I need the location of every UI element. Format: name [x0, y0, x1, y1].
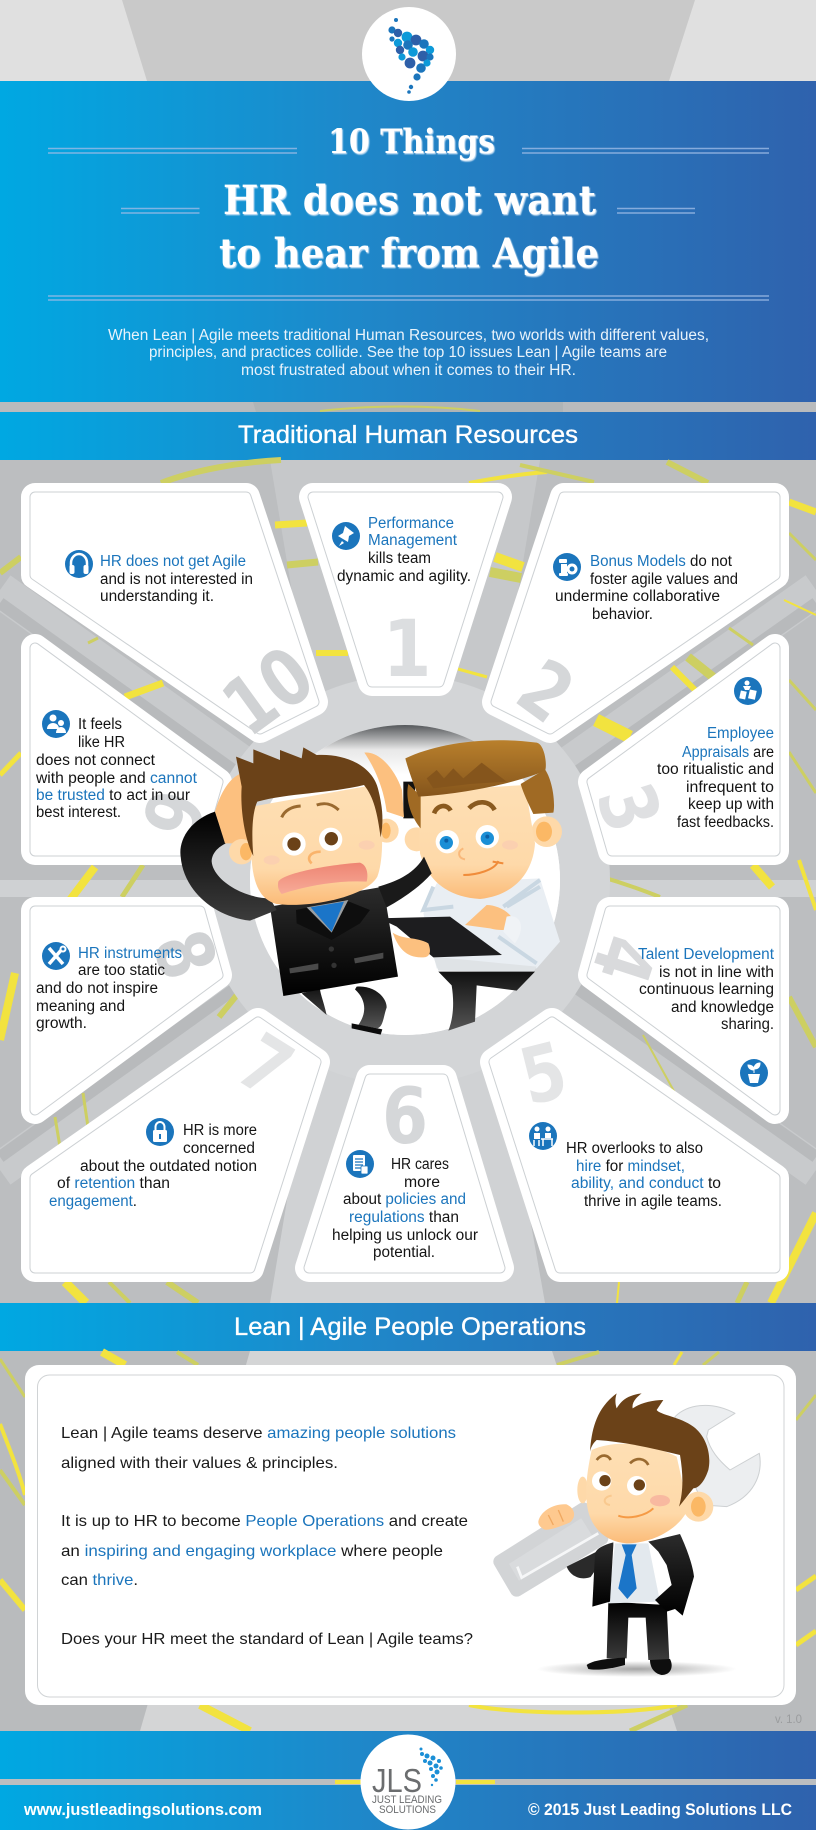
panel text: like HR	[78, 734, 125, 751]
number 8: 8	[134, 919, 235, 991]
icon: padlock	[146, 1118, 174, 1146]
illustration: man carrying wrench	[500, 1393, 760, 1677]
section heading band: traditional HR: Traditional Human Resources	[238, 421, 578, 449]
panel 4: Talent Development	[573, 911, 775, 1110]
top grey backdrop	[0, 0, 816, 81]
number 6: 6	[382, 1072, 428, 1162]
panel text	[49, 1122, 257, 1210]
panel text: be trusted to act in our	[36, 787, 190, 804]
copyright: © 2015 Just Leading Solutions LLC	[528, 1800, 792, 1819]
panel text: It feels	[78, 716, 122, 733]
panel text: meaning and	[36, 998, 125, 1015]
number 3: 3	[578, 773, 679, 842]
panel 8: HR instruments	[35, 911, 235, 1110]
icon: document	[346, 1150, 374, 1178]
panel text: infrequent to	[686, 779, 774, 796]
panel 5: hiring for mindset	[494, 1022, 775, 1268]
conclusion text: can thrive.	[61, 1572, 138, 1589]
section heading band: traditional HR	[0, 412, 816, 460]
conclusion text	[61, 1425, 473, 1648]
website: www.justleadingsolutions.com	[23, 1800, 262, 1819]
panel text: foster agile values and	[590, 571, 738, 588]
panel text: kills team	[368, 550, 431, 567]
title: 10 Things	[328, 122, 495, 162]
panel text: about policies and	[343, 1191, 466, 1208]
panel text	[638, 946, 775, 1033]
panel text: HR is more	[183, 1122, 257, 1139]
panel text: potential.	[373, 1244, 435, 1261]
icon: tools	[42, 942, 70, 970]
right colleague: shirt, head and tablet	[379, 740, 562, 1031]
number 4: 4	[573, 925, 674, 994]
title: HR does not want	[223, 177, 596, 224]
panel 1: Performance Management	[313, 497, 498, 695]
panel text	[337, 515, 471, 585]
panel text: Employee	[707, 725, 774, 742]
section heading band: people operations	[0, 1303, 816, 1351]
panel 6: policies and regulations	[309, 1072, 500, 1268]
panel text: concerned	[183, 1140, 255, 1157]
panel 9: trust	[35, 648, 226, 851]
logo badge	[362, 7, 456, 101]
icon: potted plant	[740, 1059, 768, 1087]
panel text: with people and cannot	[35, 770, 198, 787]
panel text: Talent Development	[638, 946, 775, 963]
icon: appraisal	[734, 677, 762, 705]
footer band	[0, 1731, 816, 1830]
icon: people	[42, 710, 70, 738]
panel text: behavior.	[592, 606, 653, 623]
panel 7: retention	[35, 1016, 316, 1268]
panel 10: HR does not get Agile	[35, 497, 330, 754]
number 5: 5	[511, 1024, 576, 1123]
panel text: regulations than	[349, 1209, 459, 1226]
panel text: best interest.	[36, 804, 121, 821]
panel text: and do not inspire	[36, 980, 158, 997]
conclusion text: It is up to HR to become People Operations and create	[61, 1513, 468, 1530]
intro text: principles, and practices collide. See the top 10 issues Lean | Agile teams are	[149, 344, 667, 361]
panel text: keep up with	[688, 796, 774, 813]
panel text: Performance	[368, 515, 454, 532]
grey strip under header	[0, 402, 816, 412]
header band	[0, 81, 816, 402]
version label: v. 1.0	[775, 1714, 802, 1726]
panel text	[332, 1156, 478, 1261]
panel text: of retention than	[57, 1175, 170, 1192]
panel text: are too static	[78, 962, 165, 979]
number 9: 9	[125, 779, 226, 851]
panel text: HR does not get Agile	[100, 553, 246, 570]
panel text: HR instruments	[78, 945, 182, 962]
panel text: is not in line with	[659, 964, 774, 981]
panel 2: Bonus Models	[496, 497, 775, 741]
number 7: 7	[223, 1016, 308, 1116]
icon: headphones	[65, 550, 93, 578]
panel text: hire for mindset,	[576, 1158, 685, 1175]
conclusion text: Lean | Agile teams deserve amazing people solutions	[61, 1425, 456, 1442]
panel text: undermine collaborative	[555, 588, 720, 605]
panel text: Management	[368, 532, 458, 549]
panel text: about the outdated notion	[80, 1158, 257, 1175]
panel text: HR cares	[391, 1156, 449, 1173]
panel text: more	[404, 1174, 440, 1191]
icon: people at desk	[529, 1122, 557, 1150]
number 1: 1	[383, 605, 431, 695]
panel text	[35, 716, 198, 821]
footer JLS logo	[360, 1734, 456, 1830]
panel text: Appraisals are	[682, 744, 774, 761]
central illustration: two cartoon colleagues	[180, 740, 562, 1035]
panel text: too ritualistic and	[657, 761, 774, 778]
panel text: understanding it.	[100, 588, 214, 605]
panel text: dynamic and agility.	[337, 568, 471, 585]
lower grey background with yellow curves	[0, 1351, 816, 1731]
title: to hear from Agile	[219, 230, 599, 277]
footer JLS logo: JLS	[372, 1762, 422, 1799]
panel 3: Employee Appraisals	[578, 648, 775, 851]
panel text: and is not interested in	[100, 571, 253, 588]
footer JLS logo: JUST LEADING	[372, 1794, 442, 1806]
panel text	[566, 1140, 722, 1210]
footer JLS logo: SOLUTIONS	[379, 1804, 436, 1816]
panel text	[36, 945, 182, 1032]
panel text: thrive in agile teams.	[584, 1193, 722, 1210]
icon: coins	[553, 553, 581, 581]
panel text	[657, 725, 774, 831]
panel text: ability, and conduct to	[571, 1175, 721, 1192]
panel text: and knowledge	[671, 999, 774, 1016]
intro text	[108, 327, 709, 379]
panel text: sharing.	[721, 1016, 774, 1033]
panel text: fast feedbacks.	[677, 814, 774, 831]
panel text: continuous learning	[639, 981, 774, 998]
panel text: HR overlooks to also	[566, 1140, 703, 1157]
icon: pin	[332, 522, 360, 550]
panel text: does not connect	[36, 752, 156, 769]
panel text	[100, 553, 253, 605]
panel text: Bonus Models do not	[590, 553, 733, 570]
intro text: When Lean | Agile meets traditional Human Resources, two worlds with different values,	[108, 327, 709, 344]
conclusion card	[25, 1365, 796, 1705]
number 10: 10	[206, 629, 330, 754]
panel text: engagement.	[49, 1193, 137, 1210]
radial background with spokes and yellow curves	[0, 460, 816, 1303]
number 2: 2	[501, 641, 590, 741]
section heading band: people operations: Lean | Agile People Operations	[234, 1313, 586, 1341]
intro text: most frustrated about when it comes to their HR.	[241, 362, 576, 379]
panel text: helping us unlock our	[332, 1227, 478, 1244]
conclusion text: Does your HR meet the standard of Lean | Agile teams?	[61, 1631, 473, 1648]
panel text	[555, 553, 738, 623]
left colleague: panicked in black suit	[180, 747, 432, 1035]
conclusion text: an inspiring and engaging workplace where people	[61, 1543, 443, 1560]
panel text: growth.	[36, 1015, 87, 1032]
conclusion text: aligned with their values & principles.	[61, 1455, 338, 1472]
title	[219, 122, 599, 277]
